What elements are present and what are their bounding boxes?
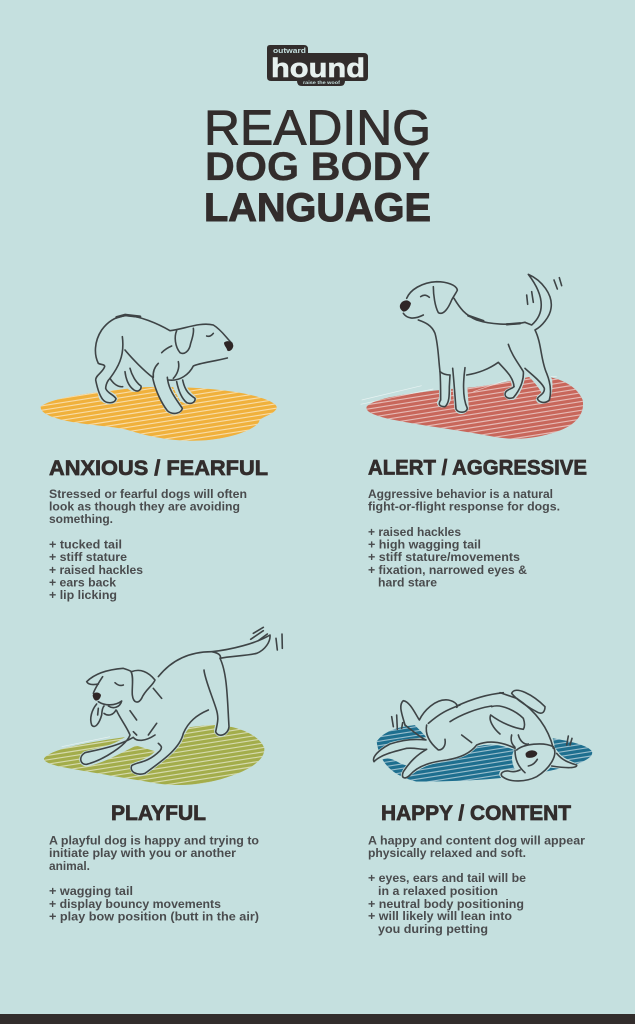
description [368, 834, 585, 860]
yellow blob [40, 386, 277, 441]
logo: outward hound [267, 45, 368, 86]
dog [95, 315, 233, 413]
title: LANGUAGE [204, 186, 431, 230]
description: Stressed or fearful dogs will often [49, 487, 247, 501]
list: + will likely will lean into [368, 909, 512, 923]
list: + tucked tail [49, 538, 122, 552]
list: + stiff stature/movements [368, 550, 520, 564]
description: look as though they are avoiding [49, 500, 240, 514]
description: animal. [49, 859, 90, 873]
footer bar [0, 1014, 635, 1024]
illustration: dog rolling on blue blob [372, 690, 592, 782]
heading: PLAYFUL [111, 802, 206, 825]
description [49, 487, 247, 526]
description: initiate play with you or another [49, 846, 236, 860]
illustration: alert dog on red blob [360, 274, 583, 439]
logo: outward hound: outward [273, 48, 306, 55]
list [49, 538, 143, 602]
green blob [44, 725, 264, 785]
description: Aggressive behavior is a natural [368, 487, 553, 501]
list: in a relaxed position [378, 884, 498, 898]
list: + wagging tail [49, 884, 133, 898]
list: + stiff stature [49, 550, 127, 564]
description: fight-or-flight response for dogs. [368, 500, 560, 514]
list [368, 871, 526, 936]
logo: outward hound: hound [271, 53, 365, 83]
list: + high wagging tail [368, 538, 481, 552]
list: + neutral body positioning [368, 897, 524, 911]
list [49, 884, 259, 924]
description: something. [49, 512, 113, 526]
description [368, 487, 560, 514]
list: hard stare [378, 576, 437, 590]
description [49, 834, 259, 873]
list: + eyes, ears and tail will be [368, 871, 526, 885]
logo: outward hound: raise the woof [303, 80, 341, 85]
red blob [360, 376, 583, 439]
blue blob [376, 725, 592, 782]
heading: ALERT / AGGRESSIVE [368, 456, 587, 480]
description: A happy and content dog will appear [368, 834, 585, 848]
panel: anxious / fearful [40, 314, 277, 602]
title [204, 102, 431, 230]
description: A playful dog is happy and trying to [49, 834, 259, 848]
dog [81, 627, 282, 774]
panel: happy / content [368, 690, 592, 936]
list: + lip licking [49, 588, 117, 602]
illustration: anxious dog on yellow blob [40, 314, 277, 441]
list [368, 525, 527, 590]
heading: ANXIOUS / FEARFUL [49, 457, 268, 480]
dog [400, 274, 562, 413]
title: DOG BODY [205, 145, 430, 189]
list: + raised hackles [368, 525, 461, 539]
heading: HAPPY / CONTENT [381, 802, 571, 825]
panel: alert / aggressive [360, 274, 586, 586]
panel: playful [44, 626, 284, 923]
description: physically relaxed and soft. [368, 846, 526, 860]
list: + display bouncy movements [49, 897, 221, 911]
list: + raised hackles [49, 563, 143, 577]
list: + ears back [49, 576, 116, 590]
dog [374, 690, 577, 782]
list: + play bow position (butt in the air) [49, 910, 259, 924]
list: + fixation, narrowed eyes & [368, 563, 527, 577]
title: READING [204, 102, 431, 156]
illustration: play-bowing dog on green blob [44, 626, 284, 785]
list: you during petting [378, 922, 488, 936]
